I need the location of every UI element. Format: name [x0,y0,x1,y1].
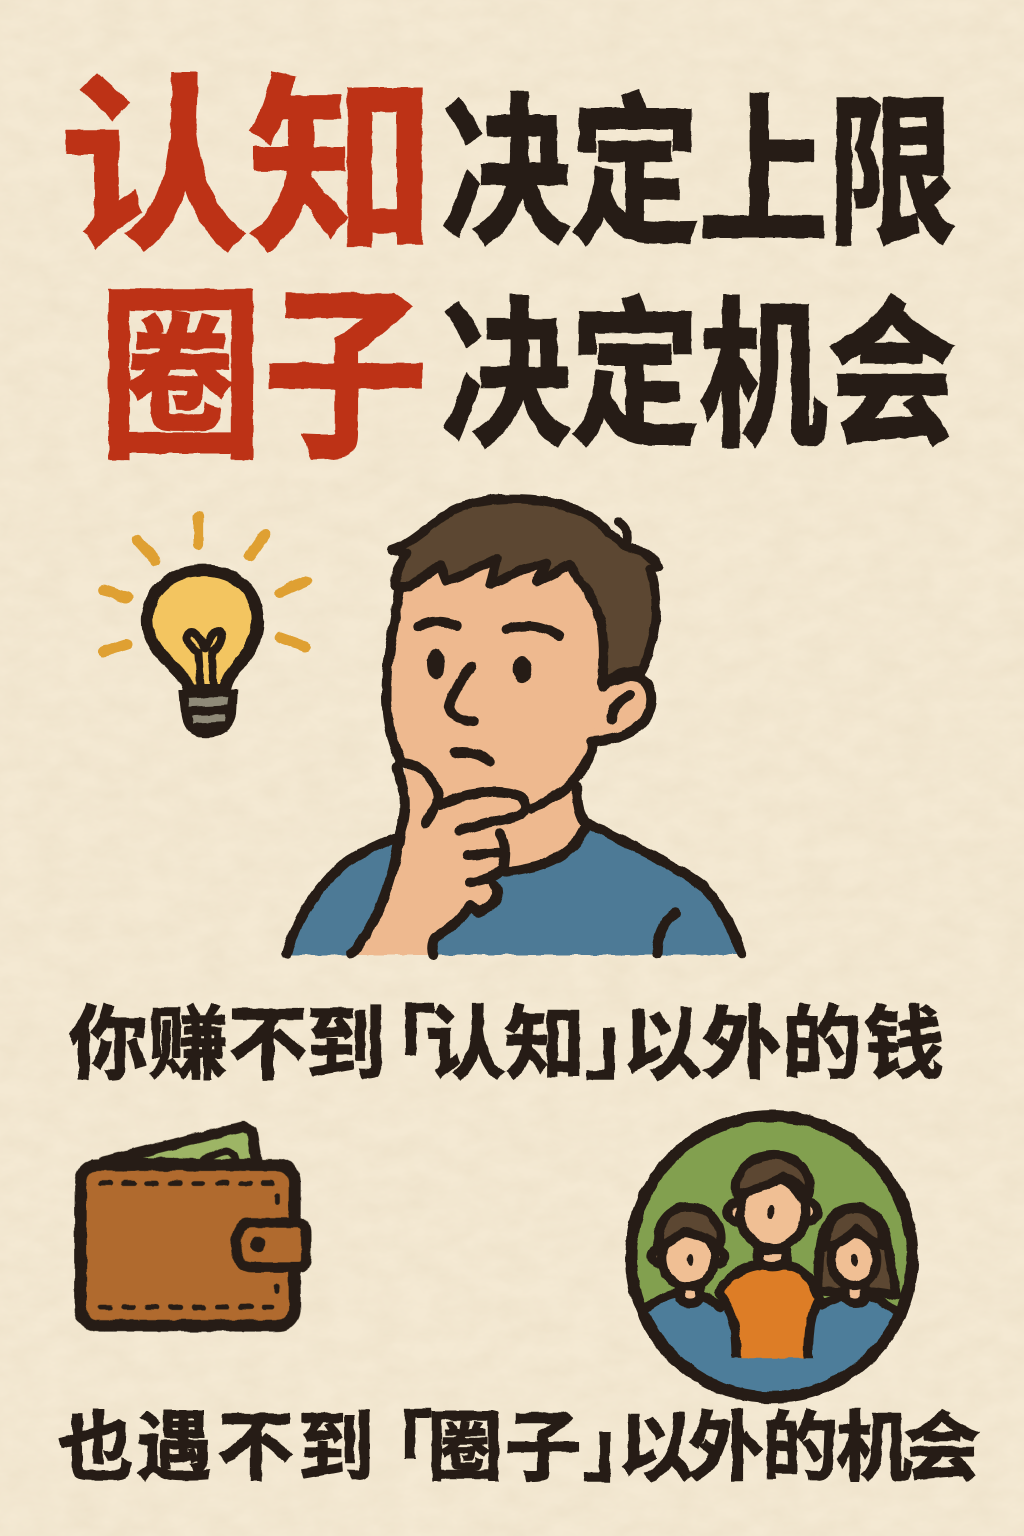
face [386,557,610,808]
person: left [652,1207,725,1303]
title: second line [98,275,956,482]
person: right [818,1207,897,1303]
hand [352,763,526,955]
illustration: thinking man [287,499,742,955]
shirt [287,823,742,955]
neck [413,783,587,872]
icon: circle of people [620,1116,920,1410]
title: first line: 认知 [60,63,436,275]
text: earnings line: 你赚不到「认知」以外的钱 [68,1000,944,1089]
text: opportunity line: 也遇不到「圈子」以外的机会 [58,1406,980,1491]
person: centre [727,1155,818,1267]
hair [392,499,658,683]
people shoulders [644,1260,897,1392]
facial features [418,622,559,761]
icon: light bulb [103,517,306,737]
icon: wallet [81,1127,306,1326]
title: first line [60,63,956,275]
ear [592,677,651,742]
title: second line: 圈子 [98,275,428,482]
